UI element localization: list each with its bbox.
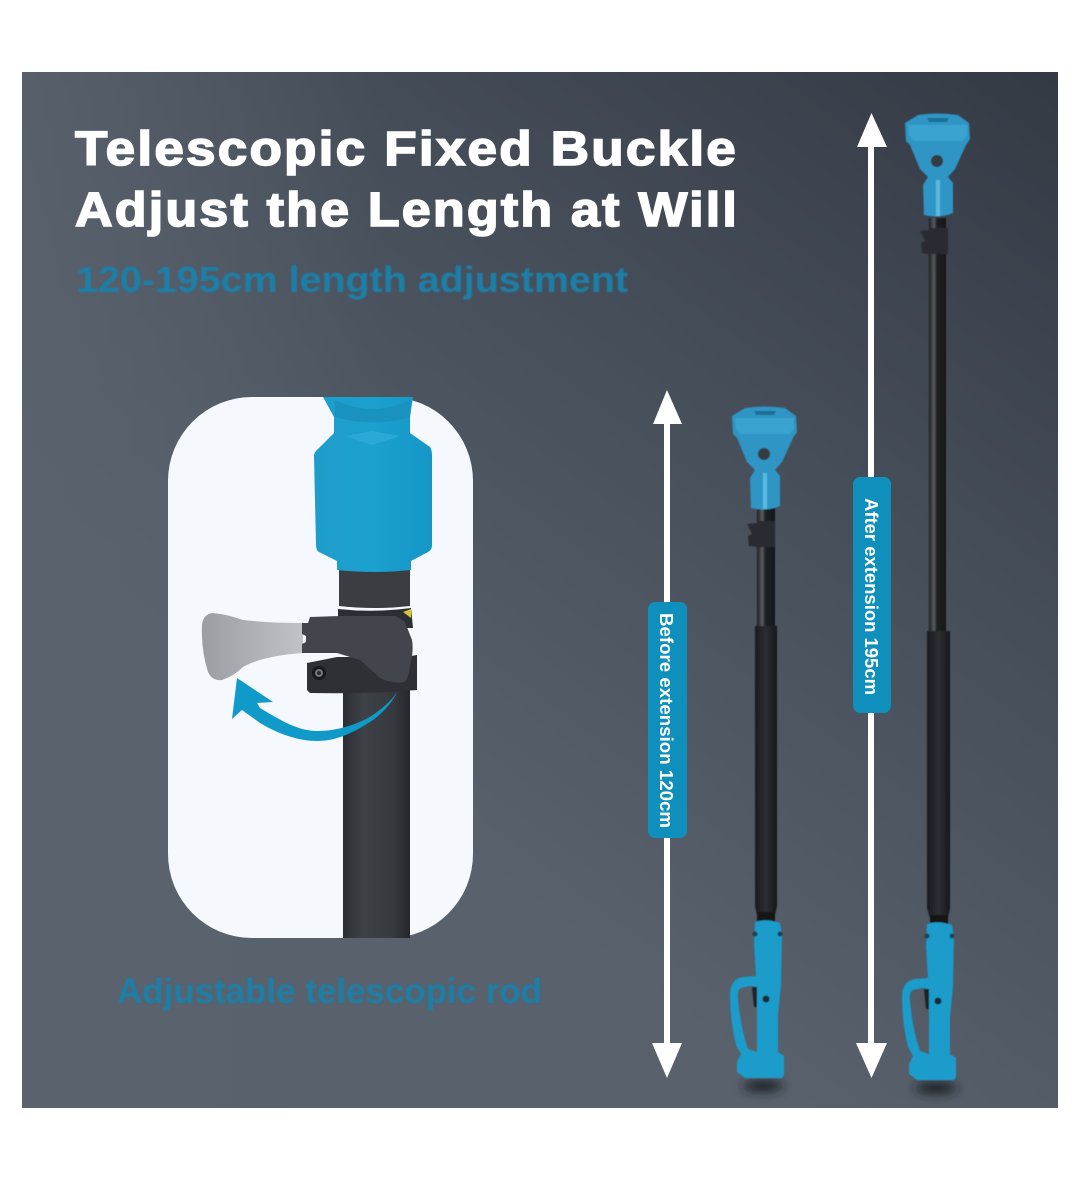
tool: extended 195cm bbox=[902, 114, 970, 1094]
arrow: before extension bbox=[652, 390, 682, 1078]
upper rod bbox=[757, 508, 775, 628]
foam grip bbox=[755, 626, 777, 915]
arrow: after extension bbox=[856, 113, 887, 1078]
caption: adjustable rod: Adjustable telescopic rod bbox=[117, 972, 542, 1011]
sleeve highlight bbox=[335, 400, 410, 422]
rod clip bbox=[747, 521, 775, 547]
faded lever position bbox=[202, 613, 303, 680]
handle body bbox=[902, 922, 956, 1080]
subtitle: 120-195cm length adjustment bbox=[76, 259, 628, 300]
upper rod bbox=[929, 218, 946, 633]
pole head bbox=[905, 114, 970, 217]
inset background bbox=[168, 397, 473, 938]
panel: buckle close-up bbox=[168, 397, 473, 938]
ground shadow bbox=[743, 1080, 783, 1092]
curved blue arrow bbox=[232, 678, 397, 741]
label: before extension bbox=[648, 602, 687, 838]
tool: retracted 120cm bbox=[730, 406, 797, 1092]
title: Adjust the Length at Will bbox=[75, 184, 739, 237]
foam grip bbox=[927, 631, 950, 918]
clamp lever bbox=[302, 616, 413, 682]
label: after extension: After extension 195cm bbox=[861, 498, 881, 695]
yellow lock band bbox=[338, 608, 413, 628]
upper rod collar bbox=[339, 565, 410, 608]
lower clamp with screw bbox=[307, 655, 417, 693]
pole head bbox=[732, 406, 797, 510]
rod clip bbox=[920, 228, 948, 254]
label: before extension: Before extension 120cm bbox=[656, 613, 676, 828]
ground shadow bbox=[915, 1082, 957, 1094]
title bbox=[75, 123, 739, 237]
lower telescopic rod bbox=[343, 688, 410, 938]
blue connector sleeve bbox=[314, 397, 432, 572]
handle body bbox=[730, 920, 784, 1078]
label: after extension bbox=[853, 477, 891, 713]
title: Telescopic Fixed Buckle bbox=[75, 123, 738, 176]
